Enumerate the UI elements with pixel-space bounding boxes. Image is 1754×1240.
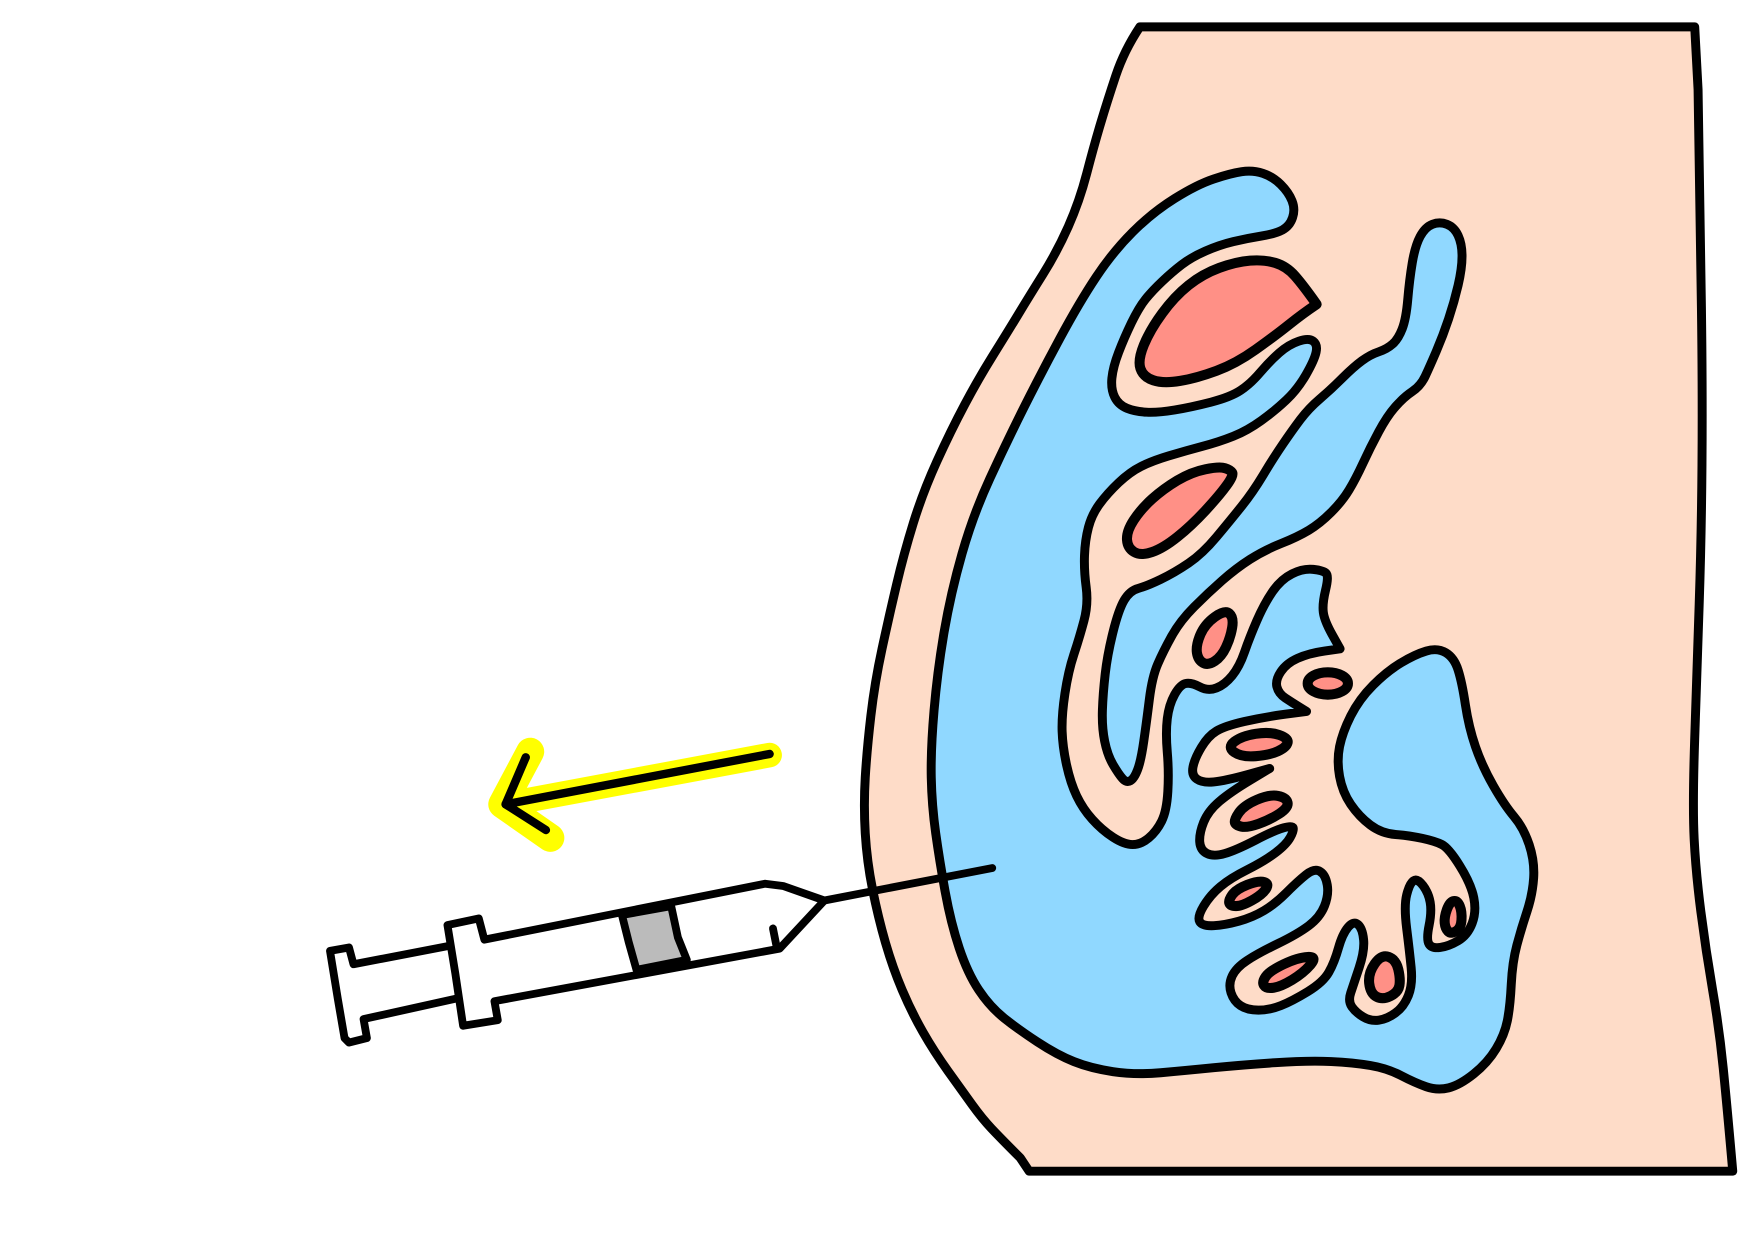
body cross-section bbox=[864, 27, 1733, 1171]
organ: large red section bbox=[1140, 260, 1317, 382]
organ: small red section 8 bbox=[1445, 901, 1462, 933]
barrel bbox=[447, 884, 824, 1026]
needle bbox=[824, 868, 992, 900]
organ: small red section 5 bbox=[1229, 882, 1267, 906]
arrow: direction of withdrawal bbox=[502, 752, 770, 838]
stopper bbox=[622, 906, 687, 970]
organs: intestinal loops bbox=[1127, 260, 1462, 998]
organ: small red section 3 bbox=[1231, 733, 1288, 756]
organ: small red section 2 bbox=[1308, 672, 1348, 695]
organ: small red section 6 bbox=[1263, 957, 1314, 988]
organ: small red section 4 bbox=[1235, 796, 1288, 827]
barrel tick mark bbox=[773, 928, 776, 945]
fluid tube lobe bbox=[1102, 223, 1462, 782]
peritoneal cavity fluid bbox=[931, 171, 1534, 1089]
organ: small red section 1 bbox=[1197, 612, 1233, 664]
syringe bbox=[330, 868, 992, 1043]
organ: middle red section bbox=[1127, 468, 1232, 554]
organ: small red section 7 bbox=[1369, 956, 1400, 998]
plunger bbox=[330, 942, 470, 1043]
